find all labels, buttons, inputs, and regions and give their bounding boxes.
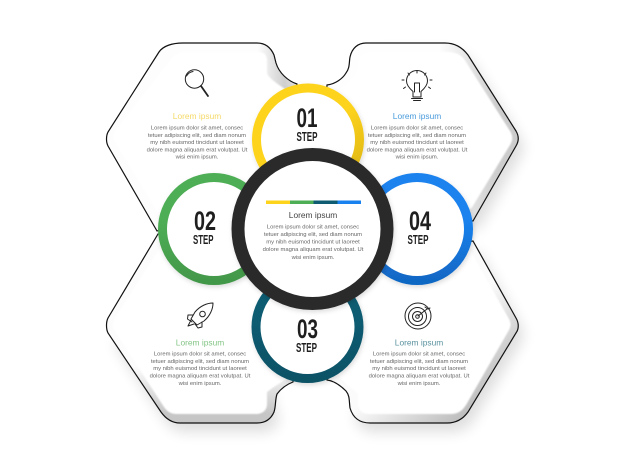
body text: Lorem ipsum dolor sit amet, consec [154, 352, 246, 358]
panel outline [320, 241, 518, 423]
heading: Lorem ipsum [395, 338, 443, 348]
number 02: 02 [194, 206, 216, 236]
body text: tetuer adipiscing elit, sed diam nonum [368, 133, 466, 139]
body text: my nibh euismod tincidunt ut laoreet [266, 240, 360, 246]
icon: magnifier [185, 70, 208, 96]
body text: tetuer adipiscing elit, sed diam nonum [370, 359, 468, 365]
body text: tetuer adipiscing elit, sed diam nonum [148, 133, 246, 139]
body text: Lorem ipsum dolor sit amet, consec [151, 126, 243, 132]
panel soft shadow [113, 52, 523, 432]
ring: blue [366, 178, 468, 280]
body text [147, 126, 248, 161]
panel outline [320, 43, 518, 221]
heading: Lorem ipsum [176, 338, 224, 348]
panel face [320, 52, 512, 209]
ring: yellow [256, 88, 360, 191]
heading: Lorem ipsum [393, 111, 441, 121]
icon: light bulb [402, 70, 432, 100]
center circle [238, 154, 387, 304]
body text: wisi enim ipsum. [178, 381, 222, 387]
body text: my nibh euismod tincidunt ut laoreet [372, 366, 466, 372]
step label: STEP [193, 233, 214, 247]
panel: bottom left [106, 234, 300, 423]
body text [367, 126, 468, 161]
step 4 ring [366, 178, 468, 280]
panel outline [106, 234, 300, 423]
panel face [113, 240, 300, 414]
step label: STEP [296, 130, 318, 144]
body text: dolore magna aliquam erat volutpat. Ut [147, 147, 248, 153]
body text: my nibh euismod tincidunt ut laoreet [150, 140, 244, 146]
step 2 ring [162, 178, 266, 280]
icon: target [405, 303, 431, 329]
body text [369, 352, 470, 387]
body text: Lorem ipsum dolor sit amet, consec [267, 224, 359, 230]
ring: green [162, 178, 266, 280]
step 3 ring [256, 276, 359, 378]
body text: wisi enim ipsum. [395, 155, 439, 161]
body text: Lorem ipsum dolor sit amet, consec [371, 126, 463, 132]
step 1 ring [256, 88, 360, 191]
number 04: 04 [409, 206, 431, 236]
colour bar [266, 200, 361, 204]
body text: dolore magna aliquam erat volutpat. Ut [367, 147, 468, 153]
panel face [320, 250, 510, 414]
body text: wisi enim ipsum. [291, 255, 335, 261]
body text: tetuer adipiscing elit, sed diam nonum [264, 232, 362, 238]
heading: Lorem ipsum [173, 111, 221, 121]
body text: dolore magna aliquam erat volutpat. Ut [150, 374, 251, 380]
step label: STEP [408, 233, 428, 247]
heading: Lorem ipsum [289, 210, 337, 220]
ring: teal [256, 276, 359, 378]
body text: tetuer adipiscing elit, sed diam nonum [151, 359, 249, 365]
panel: top left [106, 43, 300, 231]
number 03: 03 [297, 314, 318, 344]
panel face [114, 52, 295, 224]
icon: rocket [188, 303, 213, 328]
body text: dolore magna aliquam erat volutpat. Ut [369, 374, 470, 380]
body text: wisi enim ipsum. [397, 381, 441, 387]
body text: dolore magna aliquam erat volutpat. Ut [263, 247, 364, 253]
panel: bottom right [320, 241, 518, 423]
step label: STEP [296, 341, 317, 355]
panel: top right [320, 43, 518, 221]
panel outline [106, 43, 300, 231]
body text: wisi enim ipsum. [175, 155, 219, 161]
body text [263, 224, 364, 261]
ring: dark [238, 154, 387, 304]
body text: my nibh euismod tincidunt ut laoreet [370, 140, 464, 146]
body text: my nibh euismod tincidunt ut laoreet [153, 366, 247, 372]
body text [150, 352, 251, 387]
body text: Lorem ipsum dolor sit amet, consec [373, 352, 465, 358]
number 01: 01 [296, 103, 318, 133]
